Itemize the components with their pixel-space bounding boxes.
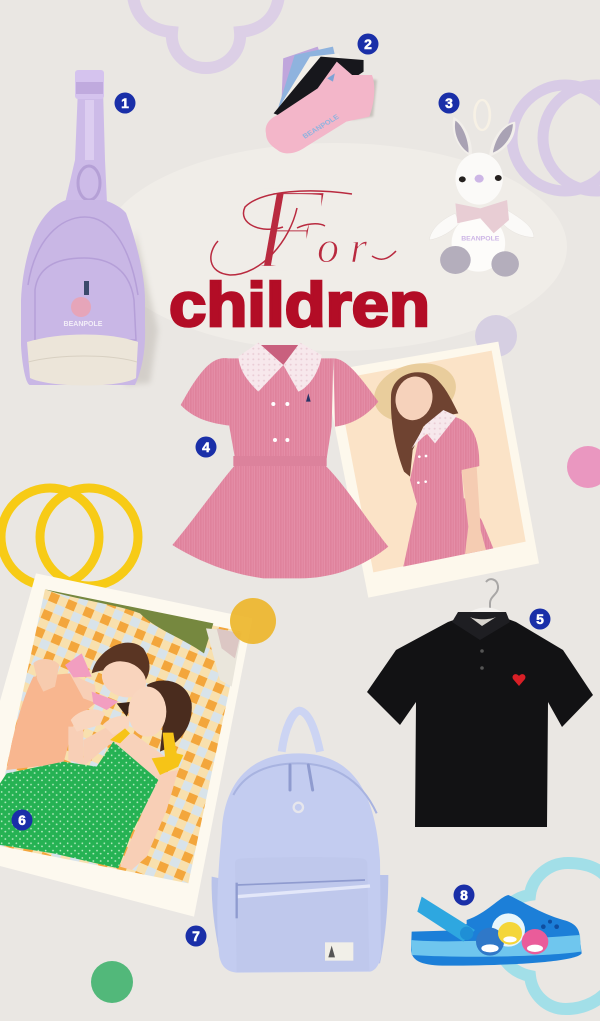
title script word: For — [211, 163, 396, 294]
badge 4 — [196, 436, 216, 458]
lilac dot — [475, 315, 517, 357]
badge 7: 7 — [192, 928, 200, 944]
badge 8: 8 — [460, 887, 468, 903]
badge 2 — [358, 34, 378, 54]
polaroid: girl in dress and hat — [324, 342, 539, 598]
item 2: stacked socks: BEANPOLE — [301, 113, 341, 140]
badge 3: 3 — [445, 95, 453, 111]
purple interlocked rings — [512, 85, 600, 191]
item 1: lilac sling bag — [21, 70, 158, 386]
girl in green dress — [0, 680, 192, 870]
pink dot — [567, 446, 600, 488]
teal clover outline — [497, 863, 600, 1009]
item 7: periwinkle backpack — [212, 711, 388, 973]
badge 5 — [530, 608, 550, 630]
badge 4: 4 — [202, 439, 210, 455]
background light oval — [103, 143, 567, 351]
girl in peach dress — [7, 643, 151, 770]
title script word: For: F — [252, 163, 327, 294]
badge 5: 5 — [536, 611, 544, 627]
item 1: lilac sling bag: BEANPOLE — [64, 321, 103, 328]
item 8: baby shark clog — [411, 895, 582, 966]
item 3: bunny plush keyring — [429, 100, 534, 277]
badge 7 — [186, 926, 206, 946]
badge 1: 1 — [121, 95, 129, 111]
title — [169, 163, 430, 340]
purple clover outline, top — [133, 0, 279, 68]
item 4: pink gingham dress with lace collar — [172, 343, 388, 578]
badge 1 — [114, 92, 136, 114]
yellow translucent dot — [230, 598, 276, 644]
title script word: For: or — [317, 223, 378, 272]
badge 2: 2 — [364, 36, 372, 52]
badge 6 — [12, 810, 32, 830]
item 5: black polo shirt on hanger — [367, 579, 593, 827]
badge 3 — [438, 92, 460, 114]
polaroid: two girls on picnic blanket — [0, 573, 252, 917]
green dot — [91, 961, 133, 1003]
item 3: bunny plush keyring: BEANPOLE — [461, 236, 500, 243]
item 2: stacked socks — [266, 47, 377, 153]
picnic blanket photo — [0, 589, 242, 883]
badge 6: 6 — [18, 812, 26, 828]
yellow interlocked rings — [1, 488, 138, 586]
grass — [45, 589, 213, 653]
badge 8 — [454, 884, 474, 906]
title bold word: children: children — [169, 271, 430, 340]
folded magazine — [206, 628, 242, 687]
